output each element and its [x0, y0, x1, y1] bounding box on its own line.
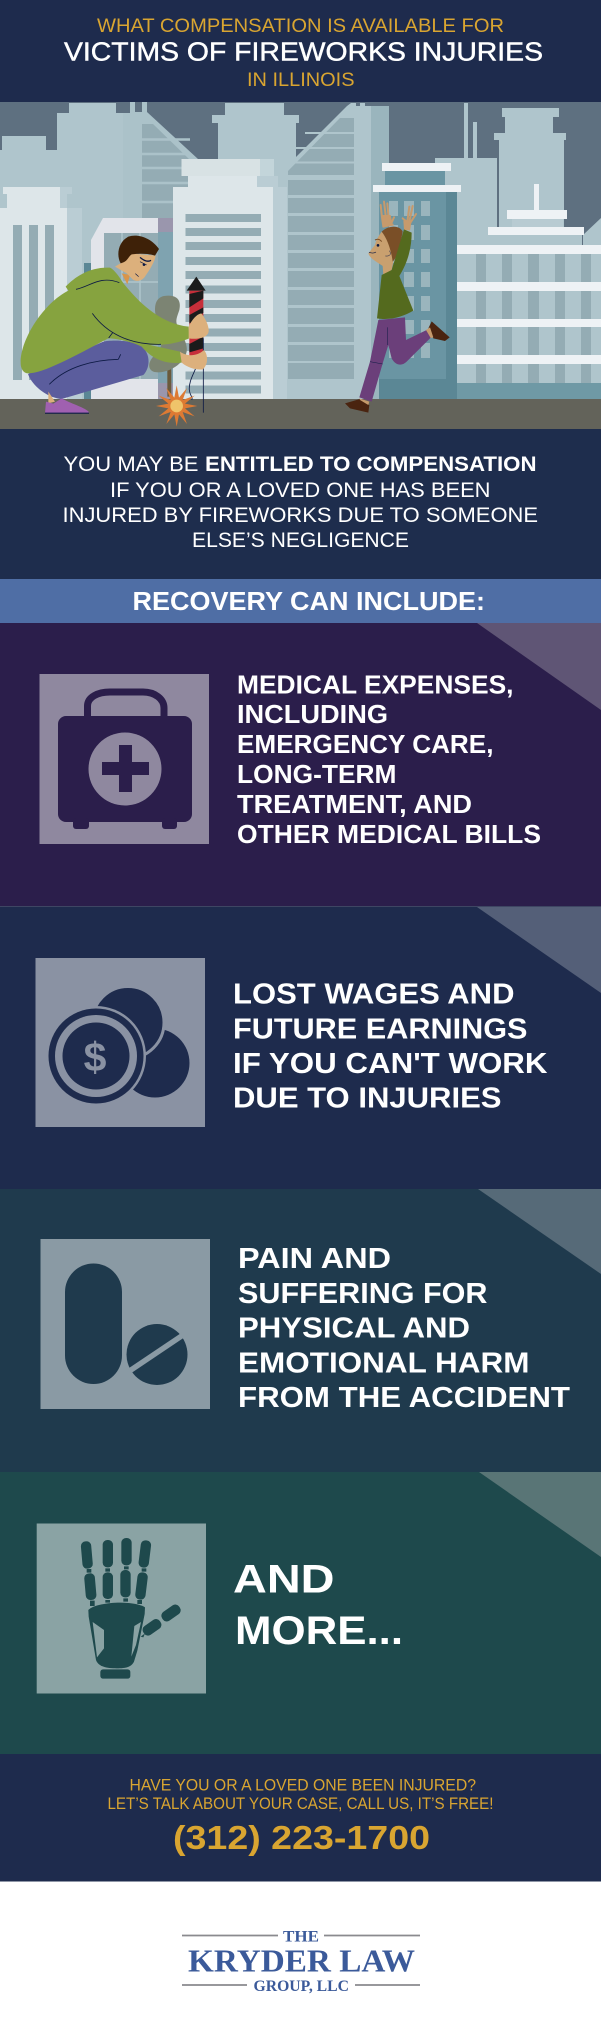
recovery banner: RECOVERY CAN INCLUDE:: [132, 588, 485, 616]
icon: medical kit: [40, 674, 209, 844]
icon: pills: [40, 1239, 210, 1409]
icon: firework rocket: [187, 277, 206, 413]
medical text: MEDICAL EXPENSES,: [237, 672, 514, 700]
call to action panel: [0, 1754, 601, 1882]
medical text: INCLUDING: [237, 701, 388, 729]
medical text: OTHER MEDICAL BILLS: [237, 821, 541, 849]
pain and suffering text: [238, 1243, 571, 1414]
cta line 1: HAVE YOU OR A LOVED ONE BEEN INJURED?: [130, 1776, 476, 1794]
panel: and more: [0, 1472, 601, 1754]
figure: jumping child: [345, 202, 450, 413]
pain and suffering text: PHYSICAL AND: [238, 1312, 470, 1344]
medical text: LONG-TERM: [237, 761, 396, 789]
child upper body: [368, 202, 416, 319]
logo: THE: [283, 1928, 319, 1946]
panel: lost wages: [0, 907, 601, 1189]
title: VICTIMS OF FIREWORKS INJURIES: [64, 36, 543, 66]
icon: prosthetic hand: [37, 1524, 206, 1694]
intro line 3: INJURED BY FIREWORKS DUE TO SOMEONE: [62, 504, 538, 527]
and more text: [233, 1558, 403, 1653]
lost wages text: LOST WAGES AND: [233, 978, 514, 1010]
intro panel: [0, 429, 601, 579]
and more text: AND: [233, 1558, 334, 1602]
pain and suffering text: EMOTIONAL HARM: [238, 1348, 530, 1380]
intro line 2: IF YOU OR A LOVED ONE HAS BEEN: [110, 479, 490, 502]
header panel: [0, 0, 601, 102]
medical text: EMERGENCY CARE,: [237, 731, 494, 759]
lost wages text: [233, 978, 548, 1114]
head of man: [115, 236, 159, 284]
icon: coins: $: [84, 1034, 107, 1080]
lost wages text: DUE TO INJURIES: [233, 1082, 502, 1114]
pain and suffering text: SUFFERING FOR: [238, 1278, 488, 1310]
logo: GROUP, LLC: [254, 1978, 349, 1995]
intro line 1 regular: YOU MAY BE: [64, 453, 198, 476]
medical text: [237, 672, 541, 849]
logo: [182, 1928, 420, 1995]
lost wages text: IF YOU CAN'T WORK: [233, 1048, 548, 1080]
panel: medical expenses: [0, 623, 601, 907]
recovery banner: [0, 579, 601, 623]
panel: pain and suffering: [0, 1189, 601, 1472]
intro line 1 bold: ENTITLED TO COMPENSATION: [205, 453, 536, 476]
icon: spark burst: [156, 385, 197, 427]
illustration: city scene with fireworks: [0, 102, 601, 429]
medical text: TREATMENT, AND: [237, 791, 472, 819]
icon: coins: [36, 958, 205, 1127]
intro line 4: ELSE’S NEGLIGENCE: [192, 529, 409, 552]
and more text: MORE...: [235, 1609, 403, 1653]
phone number: (312) 223-1700: [173, 1819, 430, 1856]
logo: KRYDER LAW: [188, 1942, 415, 1978]
header line 3: IN ILLINOIS: [247, 69, 354, 91]
pain and suffering text: PAIN AND: [238, 1243, 391, 1275]
figure: man lighting firework: [21, 236, 209, 427]
city skyline: [0, 102, 601, 399]
pain and suffering text: FROM THE ACCIDENT: [238, 1382, 571, 1414]
cta line 2: LET’S TALK ABOUT YOUR CASE, CALL US, IT’S FREE!: [108, 1795, 494, 1813]
ground: [0, 399, 601, 429]
lost wages text: FUTURE EARNINGS: [233, 1014, 528, 1046]
header line 1: WHAT COMPENSATION IS AVAILABLE FOR: [97, 15, 504, 37]
